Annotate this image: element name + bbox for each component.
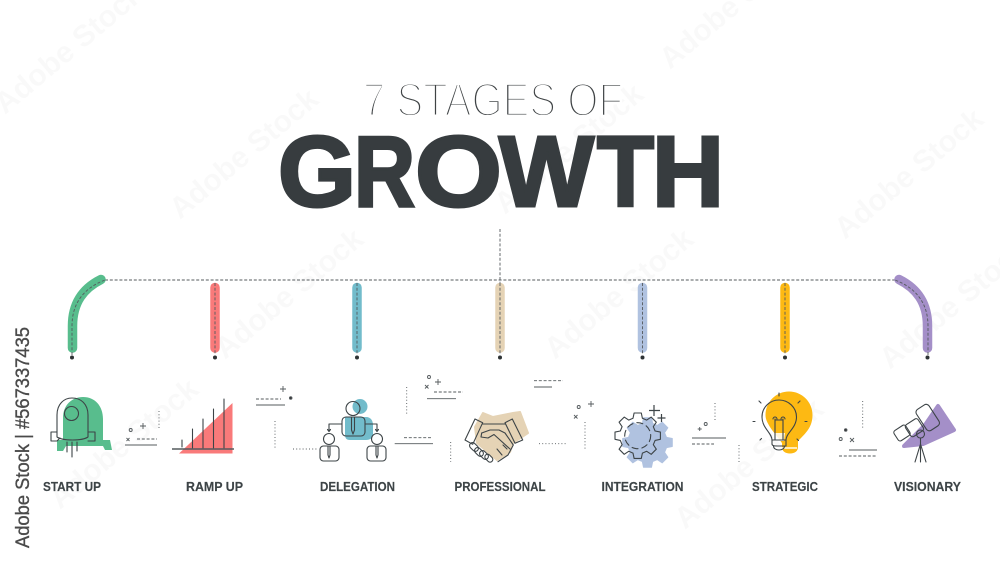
- icon: gears: [615, 405, 672, 467]
- title: growth: G: [278, 116, 356, 228]
- icon: ramp chart: [172, 399, 234, 454]
- label: strategic: STRATEGIC: [752, 480, 818, 494]
- title: growth: T: [597, 116, 654, 228]
- title: growth: W: [499, 116, 595, 228]
- icon: handshake: [465, 412, 528, 463]
- stage bar: visionary: [895, 280, 930, 360]
- label: start up: START UP: [43, 480, 101, 494]
- timeline connector: [105, 229, 895, 352]
- label: ramp up: RAMP UP: [186, 480, 243, 494]
- title: 7 stages of: 7 STAGES OF: [363, 73, 623, 126]
- label: integration: INTEGRATION: [602, 480, 684, 494]
- watermark id: Adobe Stock | #567337435: [13, 327, 34, 548]
- decoration accents: [125, 376, 877, 462]
- title: growth: H: [652, 116, 724, 228]
- stage bar: start up: [70, 280, 105, 360]
- stage bar: integration: [640, 283, 644, 360]
- label: delegation: DELEGATION: [320, 480, 395, 494]
- label: visionary: VISIONARY: [894, 480, 962, 494]
- title: growth: O: [415, 116, 502, 228]
- stage bar: professional: [498, 283, 502, 360]
- stage bar: delegation: [355, 283, 359, 360]
- icon: light bulb: [753, 392, 812, 454]
- label: professional: PROFESSIONAL: [454, 480, 546, 494]
- icon: telescope: [893, 403, 954, 462]
- icon: rocket start up: [51, 397, 112, 457]
- stage bar: strategic: [783, 283, 787, 360]
- stage bar: ramp up: [213, 283, 217, 360]
- icon: delegation team: [320, 399, 386, 461]
- title: growth: R: [354, 116, 415, 228]
